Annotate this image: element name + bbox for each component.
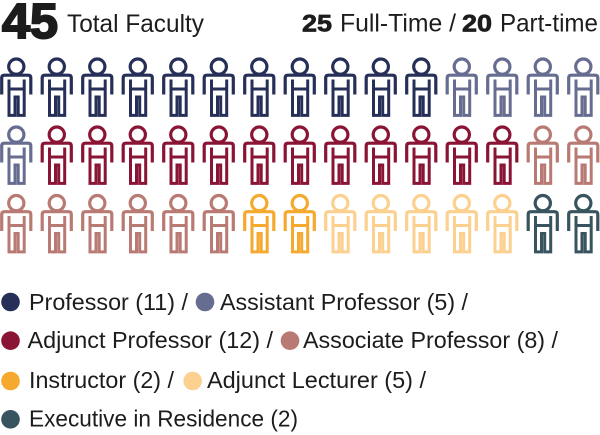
legend text: instructor: Instructor (2) / [29,367,175,393]
part-time count: 20 [462,10,492,38]
legend text: adjunct lecturer: Adjunct Lecturer (5) / [207,367,427,393]
legend dot: associate professor [281,331,299,350]
legend text: adjunct professor: Adjunct Professor (12) / [28,327,274,353]
legend [1,289,559,432]
legend dot: executive in residence [1,410,20,429]
part-time label: Part-time [500,10,598,38]
legend dot: assistant professor [196,293,214,311]
icons: professor (11) [2,59,436,115]
icons: adjunct professor (12) [42,127,517,183]
legend text: associate professor: Associate Professor (8) / [303,327,559,353]
legend dot: professor [1,293,20,311]
icons: executive in residence (2) [528,196,598,252]
legend text: assistant professor: Assistant Professor (5) / [220,289,469,315]
icons: associate professor (8) [2,127,598,252]
icons: adjunct lecturer (5) [326,196,517,252]
full-time label: Full-Time / [340,10,456,38]
pictogram: faculty icons [2,59,598,252]
legend text: professor: Professor (11) / [29,289,189,315]
header [2,0,598,49]
legend text: executive in residence: Executive in Residence (2) [29,406,298,432]
total label: Total Faculty [67,10,204,38]
icons: assistant professor (5) [2,59,598,183]
full-time count: 25 [302,10,332,38]
legend dot: adjunct lecturer [183,372,202,390]
icons: instructor (2) [245,196,314,252]
legend dot: instructor [1,372,20,390]
legend dot: adjunct professor [1,331,20,350]
